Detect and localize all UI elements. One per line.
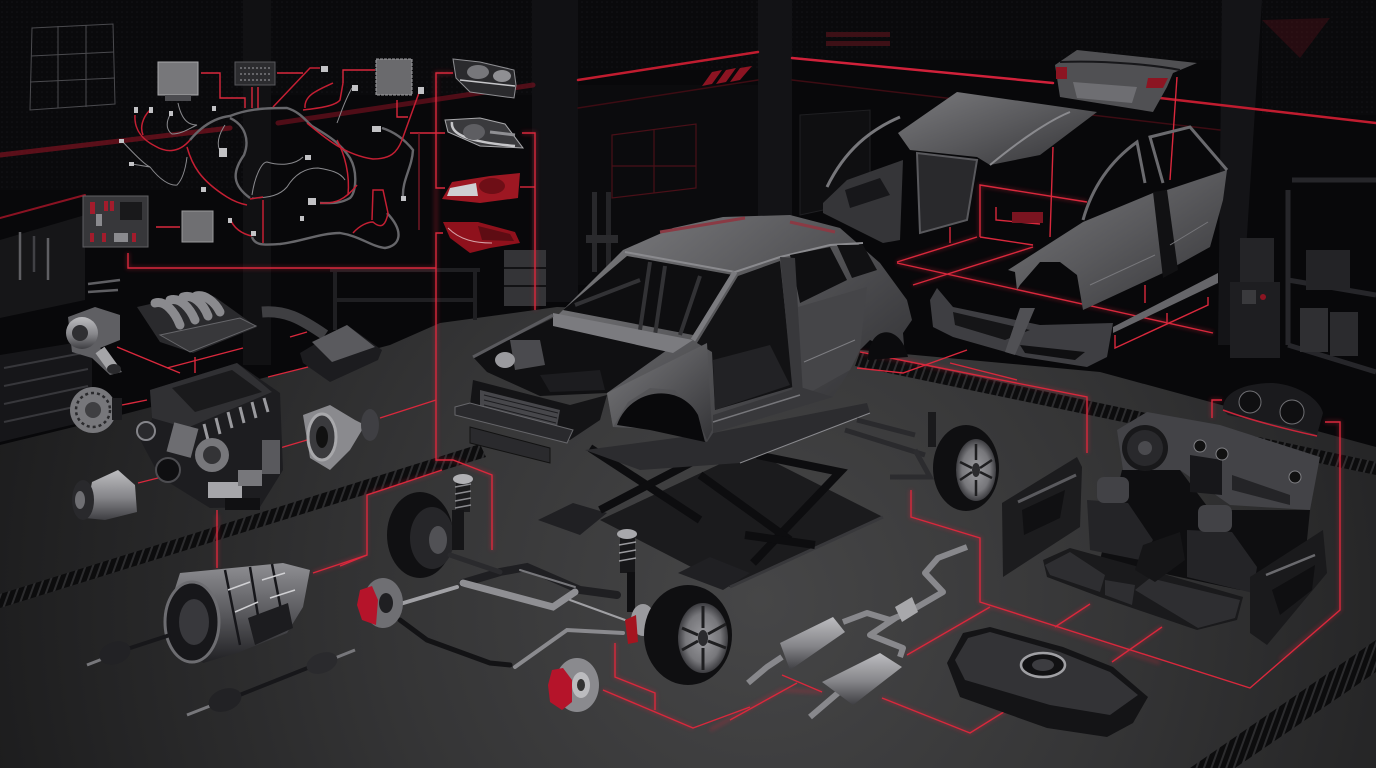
cowl band — [553, 313, 693, 353]
subframe arms — [390, 555, 625, 667]
harness black trunk — [190, 108, 413, 248]
engine — [135, 363, 283, 510]
a pillar — [693, 272, 735, 340]
instrument cluster — [1223, 383, 1323, 436]
rear door window — [790, 247, 847, 303]
right front seat — [1187, 505, 1257, 593]
control module 1 — [158, 62, 198, 101]
exhaust system — [748, 547, 967, 717]
control module 3 — [182, 211, 213, 242]
left brake disc with caliper — [357, 578, 403, 628]
roof red glints — [660, 218, 835, 232]
radiator — [480, 390, 560, 432]
interior group — [1002, 383, 1327, 645]
rear door panel — [798, 287, 867, 397]
right brake caliper — [625, 615, 638, 644]
connector lines: red schematic routing glow — [128, 73, 1340, 733]
front door opening — [697, 261, 793, 410]
tail lamp 1 — [442, 173, 520, 203]
lower cooler — [470, 427, 550, 463]
red wall box — [1012, 212, 1043, 223]
brake disc — [548, 658, 599, 712]
transmission gearbox — [165, 563, 310, 663]
radiator support — [470, 380, 607, 440]
front wheel arch — [617, 393, 705, 442]
tail lamp 2 — [443, 222, 520, 253]
lights: headlamps and tail lamps — [442, 59, 523, 253]
control module 2 — [376, 59, 412, 95]
lift shadow and base — [538, 403, 883, 590]
tool cabinet — [0, 340, 92, 442]
wall red accent lines — [0, 52, 1376, 218]
right hub — [631, 604, 655, 636]
footwell shadow — [1100, 470, 1310, 590]
wall door — [800, 110, 870, 215]
seat cushion highlights — [1045, 552, 1240, 628]
outer door left — [823, 117, 903, 243]
wall red dot corner — [1262, 18, 1330, 58]
b pillar — [780, 257, 803, 395]
fuel tank — [947, 627, 1148, 737]
car body shell on lift — [455, 215, 912, 463]
roof edge highlight — [625, 243, 863, 272]
wall grid sketch — [30, 24, 115, 110]
right strut — [617, 529, 637, 612]
rear suspension and wheel — [845, 412, 999, 511]
wiring harness — [83, 59, 424, 248]
right door card — [1250, 530, 1327, 645]
right wall shelf — [1230, 180, 1376, 372]
hood — [898, 92, 1097, 165]
background workbench — [330, 270, 480, 330]
rear wheel arch — [868, 332, 908, 360]
pegboard with tools — [0, 215, 120, 318]
inner door — [917, 153, 977, 233]
quarter window — [837, 245, 877, 278]
interior floor — [713, 345, 790, 410]
front wheel — [644, 585, 732, 685]
trunk lid — [1055, 50, 1197, 112]
left front seat — [1087, 477, 1153, 560]
front crash beam — [455, 403, 573, 443]
main body — [553, 215, 912, 442]
side body panel with doors — [1008, 127, 1227, 310]
drive shafts — [87, 635, 355, 716]
wall red sketch panel — [612, 124, 696, 198]
wall columns — [243, 0, 1262, 365]
dashboard — [1117, 412, 1320, 510]
wall stripe marks — [826, 32, 890, 46]
side sill — [713, 387, 833, 433]
background stacked boxes and stand — [504, 192, 618, 306]
fuse box — [83, 196, 148, 247]
front suspension subframe — [357, 474, 732, 712]
fuse relay block — [235, 62, 275, 85]
turbocharger — [66, 307, 122, 375]
floor — [0, 307, 1376, 768]
starter / compressor — [72, 470, 137, 520]
flywheel / clutch housing — [303, 405, 379, 470]
left strut — [452, 474, 473, 550]
floor drain grates — [0, 352, 1376, 768]
fender — [607, 343, 712, 440]
bay rim — [473, 315, 553, 357]
rear seat bench — [1043, 548, 1243, 630]
alternator — [70, 387, 122, 433]
exploded body panels right — [823, 50, 1227, 367]
left door card — [1002, 457, 1082, 577]
headlamp 2 — [445, 118, 523, 148]
left wheel — [387, 492, 454, 578]
front bumper — [930, 288, 1113, 367]
side sill — [1113, 273, 1218, 333]
wire connectors — [119, 66, 424, 236]
inner pillars seen through windshield — [575, 262, 700, 335]
engine bay — [473, 318, 667, 396]
windshield opening — [563, 256, 733, 335]
headlamp 1 — [453, 59, 516, 98]
center console — [1135, 532, 1185, 582]
connector lines: red schematic routing — [117, 70, 1340, 733]
air intake hose and filter box — [262, 312, 382, 382]
intake manifold — [137, 292, 257, 353]
wall chevron mark — [702, 66, 752, 86]
